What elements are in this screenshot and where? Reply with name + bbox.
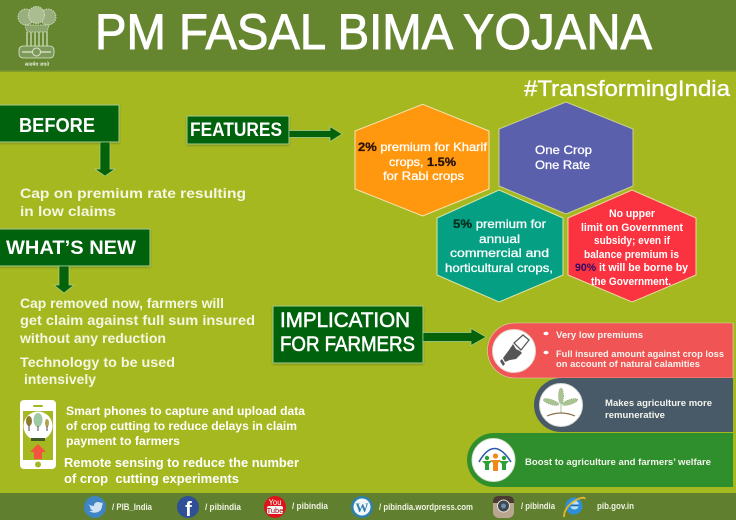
hexagon: government subsidy: the Government. bbox=[591, 276, 671, 288]
panel: feature hexagons bbox=[355, 102, 696, 302]
pill: remunerative bbox=[534, 378, 733, 432]
heading: implication for farmers: FOR FARMERS bbox=[280, 333, 415, 356]
hexagon: kharif and rabi premium: for Rabi crops bbox=[383, 169, 464, 183]
icon: wordpress bbox=[351, 496, 373, 518]
text: what's new description: intensively bbox=[24, 371, 96, 387]
header band bbox=[0, 0, 736, 72]
icon: wordpress: W bbox=[356, 500, 368, 515]
text: remote sensing: Remote sensing to reduce the number bbox=[64, 456, 299, 470]
label: youtube: / pibindia bbox=[292, 501, 329, 511]
text: remote sensing: of crop cutting experiments bbox=[64, 472, 239, 486]
hexagon: kharif and rabi premium: crops, 1.5% bbox=[389, 155, 456, 169]
icon: smartphone bbox=[20, 400, 56, 469]
pill: low premiums: Very low premiums bbox=[556, 330, 643, 341]
text: what's new description: Cap removed now, farmers will bbox=[20, 295, 224, 311]
label: website: pib.gov.in bbox=[597, 501, 634, 511]
hexagon: commercial crops: 5% premium for bbox=[453, 217, 546, 231]
arrow: what's new down bbox=[54, 266, 74, 293]
text: before description bbox=[20, 185, 246, 219]
heading: before bbox=[0, 105, 119, 142]
hexagon: one crop one rate: One Rate bbox=[535, 158, 590, 172]
footer band bbox=[0, 493, 736, 520]
icon: instagram bbox=[493, 496, 514, 518]
pill: low premiums: on account of natural calamities bbox=[556, 359, 700, 370]
heading: what's new bbox=[0, 229, 150, 266]
panel: implications list bbox=[467, 323, 733, 487]
label: twitter: / PIB_India bbox=[112, 502, 153, 512]
text: remote sensing bbox=[64, 456, 299, 486]
icon: youtube bbox=[264, 496, 286, 518]
text: what's new description: get claim against full sum insured bbox=[20, 312, 255, 328]
heading: implication for farmers bbox=[273, 306, 423, 363]
hexagon: commercial crops: annual bbox=[479, 232, 520, 246]
text: smartphones bbox=[66, 406, 306, 448]
text: what's new description: without any reduction bbox=[19, 330, 166, 346]
title: PM FASAL BIMA YOJANA bbox=[95, 4, 653, 60]
heading: implication for farmers: IMPLICATION bbox=[280, 309, 410, 332]
icon: facebook bbox=[177, 496, 199, 520]
icon: national emblem bbox=[18, 6, 56, 58]
text: smartphones: of crop cutting to reduce delays in claim bbox=[66, 421, 297, 433]
emblem caption: सत्यमेव जयते bbox=[25, 61, 49, 68]
hexagon: commercial crops: commercial and bbox=[450, 246, 549, 260]
text: what's new description: Technology to be used bbox=[20, 354, 175, 370]
icon: twitter bbox=[84, 496, 106, 518]
arrow: before down bbox=[95, 142, 115, 176]
hexagon: kharif and rabi premium: 2% premium for Kharif bbox=[358, 140, 488, 154]
icon: youtube: Tube bbox=[267, 506, 283, 515]
pill: remunerative: remunerative bbox=[605, 410, 665, 421]
label: facebook: / pibindia bbox=[205, 502, 242, 512]
icon: youtube: You bbox=[268, 498, 282, 507]
text: smartphones: Smart phones to capture and upload data bbox=[66, 406, 306, 418]
hexagon: government subsidy: 90% it will be borne by bbox=[575, 262, 689, 274]
hexagon: commercial crops bbox=[437, 190, 563, 302]
panel: what's new bbox=[0, 229, 306, 486]
hexagon: one crop one rate: One Crop bbox=[535, 143, 592, 157]
heading: features: FEATURES bbox=[190, 120, 282, 141]
pill: low premiums: Full insured amount against crop loss bbox=[556, 349, 724, 360]
heading: before: BEFORE bbox=[19, 115, 95, 137]
heading: what's new: WHAT’S NEW bbox=[6, 237, 137, 259]
pill: boost to agriculture bbox=[467, 433, 733, 487]
pill: remunerative: Makes agriculture more bbox=[605, 398, 712, 409]
hexagon: government subsidy: limit on Government bbox=[581, 222, 683, 234]
hexagon: government subsidy: balance premium is bbox=[584, 249, 679, 261]
hexagon: government subsidy bbox=[568, 190, 696, 302]
label: wordpress: / pibindia.wordpress.com bbox=[379, 502, 473, 512]
arrow: implication bbox=[423, 328, 486, 346]
text: what's new description bbox=[19, 295, 255, 387]
text: smartphones: payment to farmers bbox=[66, 436, 180, 448]
pill: low premiums bbox=[487, 323, 733, 378]
hexagon: commercial crops: horticultural crops, bbox=[445, 261, 553, 275]
icon: family under arc bbox=[479, 448, 511, 471]
hexagon: government subsidy: subsidy; even if bbox=[594, 235, 670, 247]
icon: hand with money bbox=[500, 335, 529, 366]
panel: before bbox=[0, 105, 246, 219]
footer: social links bbox=[84, 496, 634, 520]
hexagon: kharif and rabi premium bbox=[355, 104, 489, 216]
text: before description: Cap on premium rate resulting bbox=[20, 185, 246, 201]
text: before description: in low claims bbox=[20, 203, 116, 219]
hexagon: one crop one rate bbox=[499, 102, 633, 214]
icon: crop plant bbox=[543, 388, 578, 416]
pill: boost to agriculture: Boost to agriculture and farmers’ welfare bbox=[525, 457, 711, 468]
hashtag: #TransformingIndia bbox=[524, 76, 731, 101]
arrow: features bbox=[289, 126, 342, 142]
icon: internet explorer bbox=[564, 498, 585, 517]
hexagon: government subsidy: No upper bbox=[609, 208, 656, 220]
label: instagram: / pibindia bbox=[521, 501, 556, 511]
